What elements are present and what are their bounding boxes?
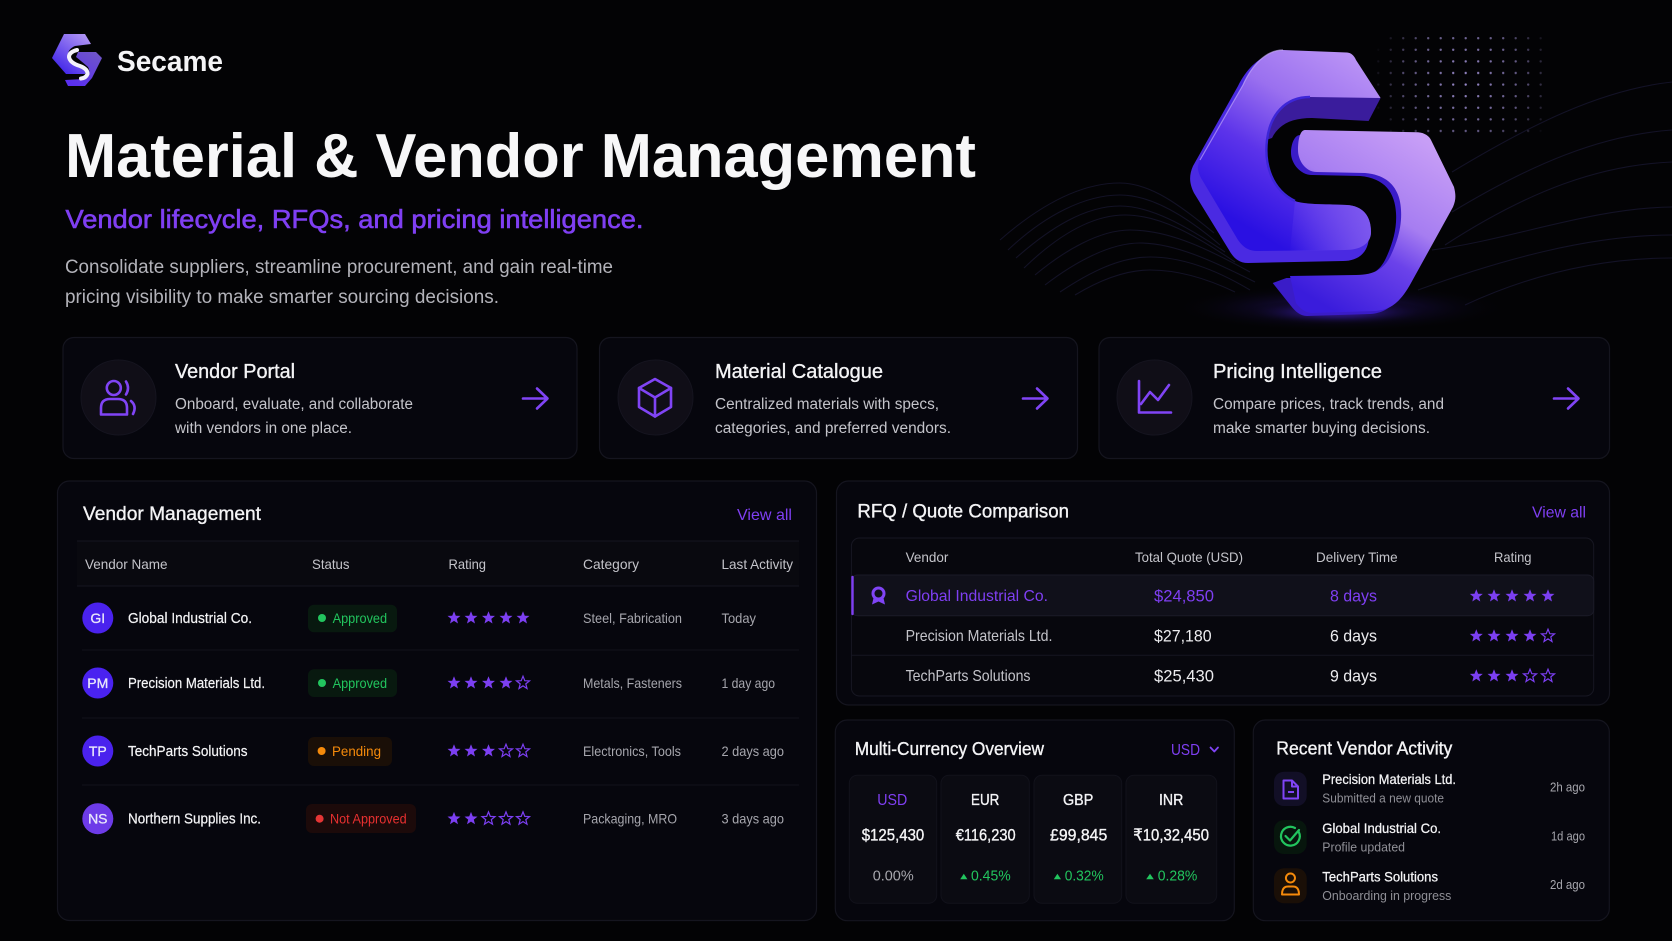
- row: Northern Supplies Inc.: Not Approved: [330, 812, 407, 827]
- panel: Material Catalogue card: Material Catalogue: [715, 360, 883, 383]
- row: Global Industrial Co.: Steel, Fabrication: [583, 610, 682, 626]
- icon: people: [101, 381, 135, 414]
- panel: Material Catalogue card: [600, 338, 1078, 458]
- row: Global Industrial Co.: Approved: [333, 611, 387, 626]
- row: TechParts Solutions: 2 days ago: [722, 743, 784, 759]
- hero decoration: dot grid: [1377, 37, 1542, 137]
- card: INR: [1126, 775, 1217, 903]
- panel: RFQ / Quote Comparison: [836, 481, 1610, 705]
- table header: Category: [583, 556, 639, 572]
- icon: small S mark: [52, 34, 102, 86]
- comparison table: Delivery Time: [1316, 549, 1398, 565]
- panel: Recent Vendor Activity: [1253, 720, 1609, 921]
- panel: Vendor Portal card: Vendor Portal: [175, 360, 295, 383]
- row: Precision Materials Ltd.: $27,180: [1154, 626, 1212, 646]
- activity: TechParts Solutions: [1274, 868, 1585, 903]
- table header: Rating: [448, 556, 486, 572]
- table header: [77, 541, 799, 586]
- card: EUR: EUR: [971, 792, 999, 809]
- row: TechParts Solutions: $25,430: [1154, 666, 1214, 686]
- heading: Multi-Currency Overview: [855, 739, 1045, 759]
- activity: TechParts Solutions: Onboarding in progress: [1322, 888, 1452, 903]
- panel: Pricing Intelligence card: [1099, 338, 1610, 458]
- row: TechParts Solutions: TechParts Solutions: [128, 744, 248, 760]
- activity: Precision Materials Ltd.: Precision Materials Ltd.: [1322, 771, 1456, 787]
- row: Precision Materials Ltd.: Precision Materials Ltd.: [906, 628, 1052, 645]
- card: INR: 0.28%: [1158, 869, 1197, 885]
- row: Northern Supplies Inc.: [82, 803, 784, 834]
- view all link: View all: [1532, 505, 1586, 522]
- view all link: View all: [737, 507, 792, 524]
- brand name: Secame: [117, 46, 223, 78]
- row: TechParts Solutions: [82, 736, 784, 766]
- row: Precision Materials Ltd.: Approved: [333, 676, 387, 691]
- row: Precision Materials Ltd.: [906, 626, 1554, 646]
- card: USD: 0.00%: [873, 869, 914, 885]
- panel: Pricing Intelligence card: make smarter buying decisions.: [1213, 420, 1430, 437]
- icon: check circle: [1281, 827, 1300, 846]
- row: TechParts Solutions: 9 days: [1330, 666, 1377, 686]
- row: Precision Materials Ltd.: 1 day ago: [722, 675, 775, 691]
- row: TechParts Solutions: [906, 666, 1554, 686]
- card: INR: ₹10,32,450: [1133, 827, 1209, 845]
- card: GBP: [1034, 775, 1122, 903]
- hero description: [65, 257, 613, 308]
- row: Northern Supplies Inc.: Northern Supplies Inc.: [128, 812, 261, 828]
- row: best quote: Global Industrial Co.: [906, 588, 1048, 605]
- row: TechParts Solutions: Pending: [332, 744, 381, 759]
- row: Northern Supplies Inc.: 3 days ago: [722, 811, 784, 827]
- row: best quote: [851, 575, 1594, 616]
- row: Precision Materials Ltd.: Precision Materials Ltd.: [128, 676, 265, 692]
- card: GBP: £99,845: [1050, 827, 1107, 845]
- row: Global Industrial Co.: [82, 602, 756, 634]
- row: Northern Supplies Inc.: Packaging, MRO: [583, 811, 677, 827]
- icon: document: [1284, 780, 1298, 798]
- hero description: pricing visibility to make smarter sourcing decisions.: [65, 287, 499, 308]
- card: EUR: €116,230: [956, 827, 1016, 845]
- activity: TechParts Solutions: 2d ago: [1550, 878, 1585, 892]
- subtitle: Vendor lifecycle, RFQs, and pricing intelligence.: [66, 204, 644, 234]
- arrow: [1554, 388, 1578, 408]
- card: USD: $125,430: [862, 827, 924, 845]
- row: Northern Supplies Inc.: NS: [88, 811, 108, 827]
- icon: box: [639, 379, 671, 416]
- card: GBP: 0.32%: [1065, 869, 1104, 885]
- card: GBP: GBP: [1063, 792, 1093, 809]
- brand logo: [52, 34, 223, 86]
- row: Precision Materials Ltd.: Metals, Fasteners: [583, 675, 682, 691]
- comparison table: Total Quote (USD): [1135, 549, 1243, 565]
- row: best quote: 8 days: [1330, 586, 1377, 606]
- hero 3D S logo: [1190, 50, 1455, 316]
- activity: Global Industrial Co.: 1d ago: [1551, 829, 1585, 843]
- row: Precision Materials Ltd.: 6 days: [1330, 626, 1377, 646]
- row: Precision Materials Ltd.: [82, 668, 775, 698]
- panel: Material Catalogue card: categories, and preferred vendors.: [715, 420, 951, 437]
- table header: Vendor Name: [85, 556, 168, 572]
- hero description: Consolidate suppliers, streamline procurement, and gain real-time: [65, 257, 613, 278]
- panel: Pricing Intelligence card: Compare prices, track trends, and: [1213, 396, 1444, 413]
- table header: Last Activity: [722, 556, 793, 572]
- activity: Global Industrial Co.: Profile updated: [1322, 839, 1405, 854]
- row: TechParts Solutions: Electronics, Tools: [583, 743, 681, 759]
- heading: Recent Vendor Activity: [1276, 738, 1452, 758]
- arrow: [523, 388, 548, 408]
- activity: Precision Materials Ltd.: [1274, 771, 1585, 806]
- activity: Global Industrial Co.: Global Industrial Co.: [1322, 820, 1441, 836]
- card: USD: USD: [877, 792, 907, 809]
- row: TechParts Solutions: TP: [89, 743, 107, 759]
- panel: Vendor Portal card: [63, 338, 577, 458]
- icon: line chart: [1139, 381, 1171, 412]
- row: TechParts Solutions: TechParts Solutions: [906, 668, 1030, 685]
- activity: TechParts Solutions: TechParts Solutions: [1322, 868, 1438, 884]
- heading: RFQ / Quote Comparison: [857, 501, 1069, 523]
- row: Precision Materials Ltd.: PM: [87, 675, 108, 691]
- comparison table: Vendor: [906, 549, 949, 565]
- panel: Pricing Intelligence card: Pricing Intelligence: [1213, 360, 1382, 383]
- row: Global Industrial Co.: Today: [722, 610, 756, 626]
- currency selector: USD: [1171, 742, 1200, 759]
- panel: Material Catalogue card: Centralized materials with specs,: [715, 396, 939, 413]
- panel: Multi-Currency Overview: [835, 720, 1234, 921]
- card: EUR: 0.45%: [971, 869, 1011, 885]
- panel: Vendor Management: [58, 481, 816, 920]
- comparison table: Rating: [1494, 549, 1532, 565]
- card: USD: [849, 775, 937, 903]
- row: Global Industrial Co.: GI: [90, 610, 105, 626]
- card: INR: INR: [1159, 792, 1183, 809]
- table header: Status: [312, 556, 350, 572]
- activity: Precision Materials Ltd.: 2h ago: [1550, 780, 1585, 794]
- icon: person: [1282, 874, 1299, 894]
- arrow: [1023, 388, 1048, 408]
- card: EUR: [941, 775, 1029, 903]
- heading: Vendor Management: [83, 503, 262, 525]
- row: Global Industrial Co.: Global Industrial Co.: [128, 611, 252, 627]
- activity: Precision Materials Ltd.: Submitted a new quote: [1322, 790, 1444, 805]
- comparison table: [851, 538, 1594, 696]
- hero decoration: wave lines: [1000, 82, 1672, 305]
- title: Material & Vendor Management: [65, 122, 976, 191]
- hero decoration: floor glow: [1175, 284, 1505, 332]
- panel: Vendor Portal card: with vendors in one place.: [174, 420, 352, 437]
- activity: Global Industrial Co.: [1274, 820, 1585, 854]
- panel: Vendor Portal card: Onboard, evaluate, and collaborate: [175, 396, 413, 413]
- row: best quote: $24,850: [1154, 586, 1214, 606]
- icon: award medal: [872, 588, 885, 604]
